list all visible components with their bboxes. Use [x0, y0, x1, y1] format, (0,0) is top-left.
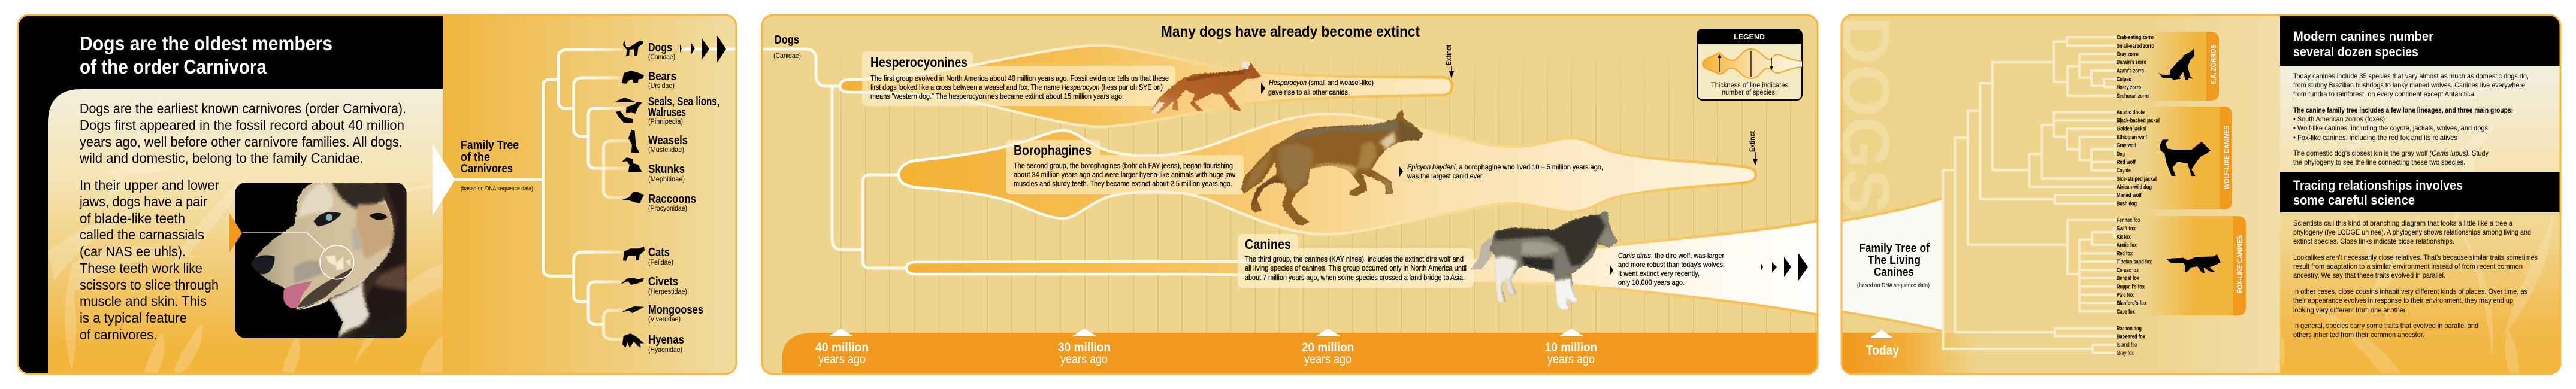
dogs canidae label — [773, 34, 801, 60]
borophagines text box: The second group, the borophagines (bohr oh FAY jeens), began flourishing — [1014, 162, 1233, 170]
carnassial teeth text block — [79, 177, 219, 342]
arrow: hesperocyonines extinct: Extinct — [1446, 45, 1453, 65]
living canines tree label: Canines — [1874, 266, 1914, 279]
heading: dogs are the oldest members: of the order Carnivora — [80, 56, 267, 78]
carnivore family labels — [648, 41, 719, 354]
heading: dogs are the oldest members: Dogs are the oldest members — [80, 32, 332, 54]
modern canines text block: from stubby Brazilian bushdogs to lanky maned wolves. Canines live everywhere — [2293, 81, 2525, 89]
modern canines text block: the phylogeny to see the line connecting these two species. — [2293, 158, 2465, 166]
species labels: Bat-eared fox — [2117, 333, 2145, 340]
tracing relationships text block: In general, species carry some traits that evolved in parallel and — [2293, 321, 2478, 330]
living canines tree label: The Living — [1868, 254, 1921, 267]
living canines tree label: (based on DNA sequence data) — [1857, 282, 1930, 289]
icon: mongoose silhouette — [622, 306, 644, 313]
species labels: Dog — [2117, 151, 2125, 157]
canines text box: Canines — [1245, 236, 1291, 252]
species labels: Black-backed jackal — [2117, 118, 2160, 124]
carnassial teeth text block: In their upper and lower — [80, 177, 219, 193]
timeline marker: today — [1866, 330, 1899, 358]
species labels: Gray wolf — [2117, 142, 2136, 149]
panel: family tree of the living canines — [1828, 15, 2562, 374]
dog lineage continuation with growing triangles — [679, 35, 736, 63]
tracing relationships text block: Lookalikes aren't necessarily close relatives. That's because similar traits sometimes — [2293, 253, 2538, 262]
carnassial teeth text block: (car NAS ee uhls). — [80, 244, 186, 259]
illustration: canis dirus — [1471, 211, 1622, 312]
tracing relationships text block: looking very different from one another. — [2293, 306, 2407, 314]
hesperocyonines text box: means "western dog." The hesperocyonines became extinct about 15 million years ago. — [870, 92, 1124, 101]
carnivore family labels: Seals, Sea lions, — [648, 95, 719, 108]
group band: south american zorros — [2142, 32, 2219, 101]
heading: modern canines — [2293, 29, 2433, 59]
species labels: Kit fox — [2117, 234, 2131, 241]
carnassial teeth text block: of blade-like teeth — [80, 211, 185, 226]
canines text box: The third group, the canines (KAY nines), includes the extinct dire wolf and — [1245, 255, 1464, 263]
species labels: Bengal fox — [2117, 275, 2139, 282]
timeline markers: 40 million — [815, 341, 869, 354]
legend — [1697, 29, 1804, 100]
canine lineage growing triangles — [1761, 253, 1808, 281]
carnivore family labels: Raccoons — [648, 193, 696, 206]
borophagines text box: muscles and sturdy teeth. They became extinct about 2.5 million years ago. — [1014, 180, 1232, 188]
icon: fox silhouette — [2167, 254, 2221, 273]
carnivore family labels: Mongooses — [648, 303, 703, 317]
species labels: Gray zorro — [2117, 51, 2139, 57]
species labels: Small-eared zorro — [2117, 43, 2154, 50]
modern canines text block — [2293, 72, 2529, 166]
modern canines text block: The canine family tree includes a few lone lineages, and three main groups: — [2293, 106, 2513, 114]
living canines phylogeny branches — [1943, 37, 2117, 353]
living canines tree label: Family Tree of — [1859, 242, 1930, 255]
canines text box: about 7 million years ago, when some species crossed a land bridge to Asia. — [1245, 273, 1465, 282]
species labels: Swift fox — [2117, 226, 2136, 232]
caption: epicyon: was the largest canid ever. — [1407, 172, 1484, 180]
caption: dire wolf — [1610, 251, 1725, 287]
species labels: Ruppell's fox — [2117, 284, 2145, 290]
tracing relationships text block: result from adaptation to a similar environment instead of from recent common — [2293, 262, 2523, 271]
family tree of the carnivores label: Family Tree — [461, 139, 519, 152]
carnivore family labels: Skunks — [648, 163, 685, 176]
carnassial teeth text block: These teeth work like — [80, 260, 202, 276]
species labels: Hoary zorro — [2117, 84, 2141, 91]
species labels: Red fox — [2117, 251, 2133, 257]
species labels: Blanford's fox — [2117, 300, 2146, 307]
panel: dogs are the oldest carnivores — [18, 15, 737, 374]
icon: howling zorro silhouette — [2158, 49, 2194, 80]
species labels: Pale fox — [2117, 292, 2134, 299]
panel: many dogs have become extinct — [762, 15, 1821, 374]
intro text block: Dogs are the earliest known carnivores (order Carnivora). — [80, 101, 406, 116]
illustration: epicyon haydeni — [1234, 108, 1426, 227]
carnivore family labels: Walruses — [648, 106, 686, 119]
carnivore family labels: (Pinnipedia) — [648, 118, 683, 126]
carnassial teeth text block: scissors to slice through — [80, 277, 219, 293]
timeline markers: years ago — [1060, 352, 1108, 366]
right text column — [2280, 15, 2562, 374]
arrow: borophagines extinct: Extinct — [1749, 131, 1756, 152]
illustration: hesperocyon — [1151, 61, 1261, 114]
carnivore family labels: (Felidae) — [648, 259, 673, 266]
species labels: Red wolf — [2117, 159, 2136, 166]
modern canines text block: The domestic dog's closest kin is the gray wolf (Canis lupus). Study — [2293, 149, 2489, 157]
heading: dogs are the oldest members — [80, 32, 332, 78]
living canines tree label — [1857, 242, 1930, 289]
intro text block — [79, 101, 406, 166]
lineage shape: borophagines — [899, 114, 1756, 235]
tracing relationships text block: Scientists call this kind of branching diagram that looks a little like a tree a — [2293, 219, 2512, 227]
icon: skunk silhouette — [622, 157, 642, 172]
modern canines text block: Today canines include 35 species that vary almost as much as domestic dogs do, — [2293, 72, 2529, 80]
hesperocyonines text box — [862, 51, 1175, 106]
species labels: Fennec fox — [2117, 217, 2140, 224]
species labels: Tibetan sand fox — [2117, 259, 2152, 265]
species labels: African wild dog — [2117, 184, 2152, 190]
intro text block: years ago, well before other carnivore families. All dogs, — [80, 134, 403, 150]
carnassial teeth text block: is a typical feature — [80, 310, 187, 326]
carnivore family labels: (Procyonidae) — [648, 205, 687, 212]
caption: epicyon — [1399, 163, 1603, 180]
hesperocyonines text box: Hesperocyonines — [870, 54, 967, 70]
icon: cat silhouette — [623, 247, 645, 261]
icon: bear silhouette — [622, 71, 644, 84]
group band: fox-like canines: FOX-LIKE CANINES — [2235, 235, 2244, 293]
species labels: Side-striped jackal — [2117, 176, 2157, 183]
caption: dire wolf: It went extinct very recently, — [1618, 269, 1700, 278]
modern canines text block: from tundra to rainforest, on every continent except Antarctica. — [2293, 90, 2476, 98]
icon: civet silhouette — [621, 278, 644, 285]
icon: hyena silhouette — [622, 333, 644, 348]
species labels: Gray fox — [2117, 350, 2134, 357]
family tree of the carnivores label: of the — [461, 151, 490, 164]
intro text block: wild and domestic, belong to the family Canidae. — [79, 150, 364, 166]
heading: modern canines: several dozen species — [2293, 44, 2418, 59]
carnivore family labels: (Canidae) — [648, 54, 675, 61]
species labels: Sechuran zorro — [2117, 93, 2149, 99]
species labels: Bush dog — [2117, 201, 2137, 208]
icon: seal silhouette — [615, 98, 635, 102]
lineage shape: hesperocyonines — [840, 45, 1452, 127]
species labels: Racoon dog — [2117, 326, 2142, 332]
hesperocyonines text box: first dogs looked like a cross between a weasel and fox. The name Hesperocyon (hess pur oh SYE on) — [870, 83, 1163, 92]
legend: Thickness of line indicates — [1711, 82, 1788, 89]
carnivore family labels: Civets — [648, 275, 678, 288]
species labels: Darwin's zorro — [2117, 59, 2146, 66]
species labels: Cape fox — [2117, 309, 2135, 315]
family tree of the carnivores label: Carnivores — [461, 162, 513, 175]
carnassial teeth text block: muscle and skin. This — [80, 293, 207, 309]
heading: tracing relationships: Tracing relationships involves — [2293, 178, 2463, 193]
caption: dire wolf: only 10,000 years ago. — [1618, 278, 1685, 287]
carnivore family labels: Weasels — [648, 134, 688, 147]
group band: wolf-like canines — [2142, 107, 2232, 209]
family tree of the carnivores label — [461, 139, 533, 192]
modern canines text block: • South American zorros (foxes) — [2293, 115, 2385, 123]
panel: family tree of the living canines: DOGS — [1828, 16, 1903, 214]
carnivore family labels: (Ursidae) — [648, 83, 675, 90]
canines text box — [1238, 234, 1474, 288]
species labels: Coyote — [2117, 168, 2131, 174]
carnassial teeth text block: of carnivores. — [80, 327, 157, 342]
group band: south american zorros: S.A. ZORROS — [2209, 45, 2218, 84]
chart title: Many dogs have already become extinct — [1161, 23, 1420, 40]
group band: wolf-like canines: WOLF-LIKE CANINES — [2222, 126, 2231, 189]
arrow: hesperocyonines extinct — [1446, 45, 1454, 78]
carnivore family labels: (Hyaenidae) — [648, 347, 682, 354]
heading: tracing relationships: some careful science — [2293, 193, 2415, 208]
timeline markers — [815, 329, 1597, 366]
caption: hesperocyon — [1261, 78, 1374, 96]
heading: modern canines: Modern canines number — [2293, 29, 2433, 44]
borophagines text box: about 34 million years ago and were larger hyena-like animals with huge jaw — [1014, 171, 1236, 179]
carnivore family labels: Dogs — [648, 41, 672, 54]
icon: dog silhouette — [2160, 139, 2211, 176]
species labels: Maned wolf — [2117, 193, 2142, 199]
caption: hesperocyon: Hesperocyon (small and weasel-like) — [1269, 78, 1374, 87]
family tree of the carnivores label: (based on DNA sequence data) — [461, 186, 533, 192]
caption: dire wolf: and more robust than today's wolves. — [1618, 260, 1725, 269]
carnivore family labels: Cats — [648, 246, 670, 259]
tracing relationships text block: extinct species. Close links indicate close relationships. — [2293, 237, 2454, 245]
caption: hesperocyon: gave rise to all other canids. — [1268, 88, 1350, 96]
modern canines text block: • Wolf-like canines, including the coyote, jackals, wolves, and dogs — [2293, 124, 2488, 132]
species labels: Culpeo — [2117, 77, 2131, 83]
species labels: Crab-eating zorro — [2117, 35, 2154, 41]
borophagines text box: Borophagines — [1014, 142, 1092, 158]
species labels: Island fox — [2117, 342, 2137, 348]
modern canines text block: • Fox-like canines, including the red fox and its relatives — [2293, 133, 2457, 142]
arrow: white arrow into carnivore tree — [433, 144, 455, 215]
species labels: Golden jackal — [2117, 126, 2146, 132]
legend: number of species. — [1722, 89, 1777, 96]
arrow: borophagines extinct — [1749, 131, 1758, 166]
icon: sea lion silhouette — [626, 102, 642, 114]
icon: weasel silhouette — [628, 130, 639, 153]
borophagines text box — [1006, 140, 1244, 194]
carnivore family labels: (Viverridae) — [648, 316, 681, 323]
carnivore family labels: Hyenas — [648, 333, 684, 347]
timeline markers: years ago — [1547, 352, 1595, 366]
tracing relationships text block — [2293, 219, 2538, 339]
species labels: Ethiopian wolf — [2117, 134, 2147, 141]
heading: tracing relationships — [2293, 178, 2463, 208]
icon: walrus silhouette — [616, 111, 633, 123]
species labels: Arctic fox — [2117, 242, 2137, 249]
species labels: Asiatic dhole — [2117, 110, 2145, 116]
lineage shape: canines — [906, 220, 1821, 315]
tracing relationships text block: ancestry. We say that these traits evolved in parallel. — [2293, 271, 2445, 279]
species labels: Azara's zorro — [2117, 68, 2144, 74]
carnivore phylogeny branches — [455, 50, 630, 339]
group band: fox-like canines — [2142, 216, 2246, 315]
intro text block: Dogs first appeared in the fossil record about 40 million — [80, 117, 404, 133]
icon: raccoon silhouette — [621, 192, 644, 203]
dogs canidae label: (Canidae) — [773, 53, 801, 60]
tracing relationships text block: others inherited from their common ancestor. — [2293, 330, 2424, 339]
hesperocyonines text box: The first group evolved in North America about 40 million years ago. Fossil evidence tells us that these — [870, 74, 1169, 83]
carnassial teeth text block: jaws, dogs have a pair — [79, 194, 207, 209]
caption: dire wolf: Canis dirus, the dire wolf, was larger — [1618, 251, 1724, 260]
carnivore family labels: (Mustelidae) — [648, 147, 684, 154]
photo: dog head showing teeth — [235, 180, 407, 339]
carnassial teeth text block: called the carnassials — [80, 227, 204, 242]
timeline markers: 20 million — [1302, 341, 1354, 354]
timeline markers: 10 million — [1545, 341, 1597, 354]
tracing relationships text block: In other cases, close cousins inhabit very different kinds of places. Over time, as — [2293, 287, 2527, 296]
timeline markers: years ago — [1304, 352, 1352, 366]
species labels: Corsac fox — [2117, 267, 2139, 274]
dogs canidae label: Dogs — [775, 34, 799, 47]
tracing relationships text block: phylogeny (fye LODGE uh nee). A phylogeny shows relationships among living and — [2293, 228, 2531, 236]
carnivore family labels: (Mephitinae) — [648, 176, 685, 183]
carnivore family labels: (Herpestidae) — [648, 288, 687, 296]
timeline markers: 30 million — [1058, 341, 1111, 354]
icon: dog silhouette — [623, 40, 643, 56]
carnivore family labels: Bears — [648, 70, 676, 83]
arrow: orange pointer to teeth — [229, 213, 242, 253]
legend: LEGEND — [1734, 32, 1765, 41]
trunk branches to the three dog groups — [762, 49, 908, 268]
caption: epicyon: Epicyon haydeni, a borophagine who lived 10 – 5 million years ago, — [1407, 163, 1603, 171]
tracing relationships text block: their appearance evolves in response to their environment, they may end up — [2293, 296, 2513, 305]
species labels — [2117, 35, 2160, 357]
timeline markers: years ago — [818, 352, 866, 366]
canines text box: all living species of canines. This group occurred only in North America until — [1245, 264, 1467, 272]
timeline marker: today: Today — [1866, 342, 1899, 358]
